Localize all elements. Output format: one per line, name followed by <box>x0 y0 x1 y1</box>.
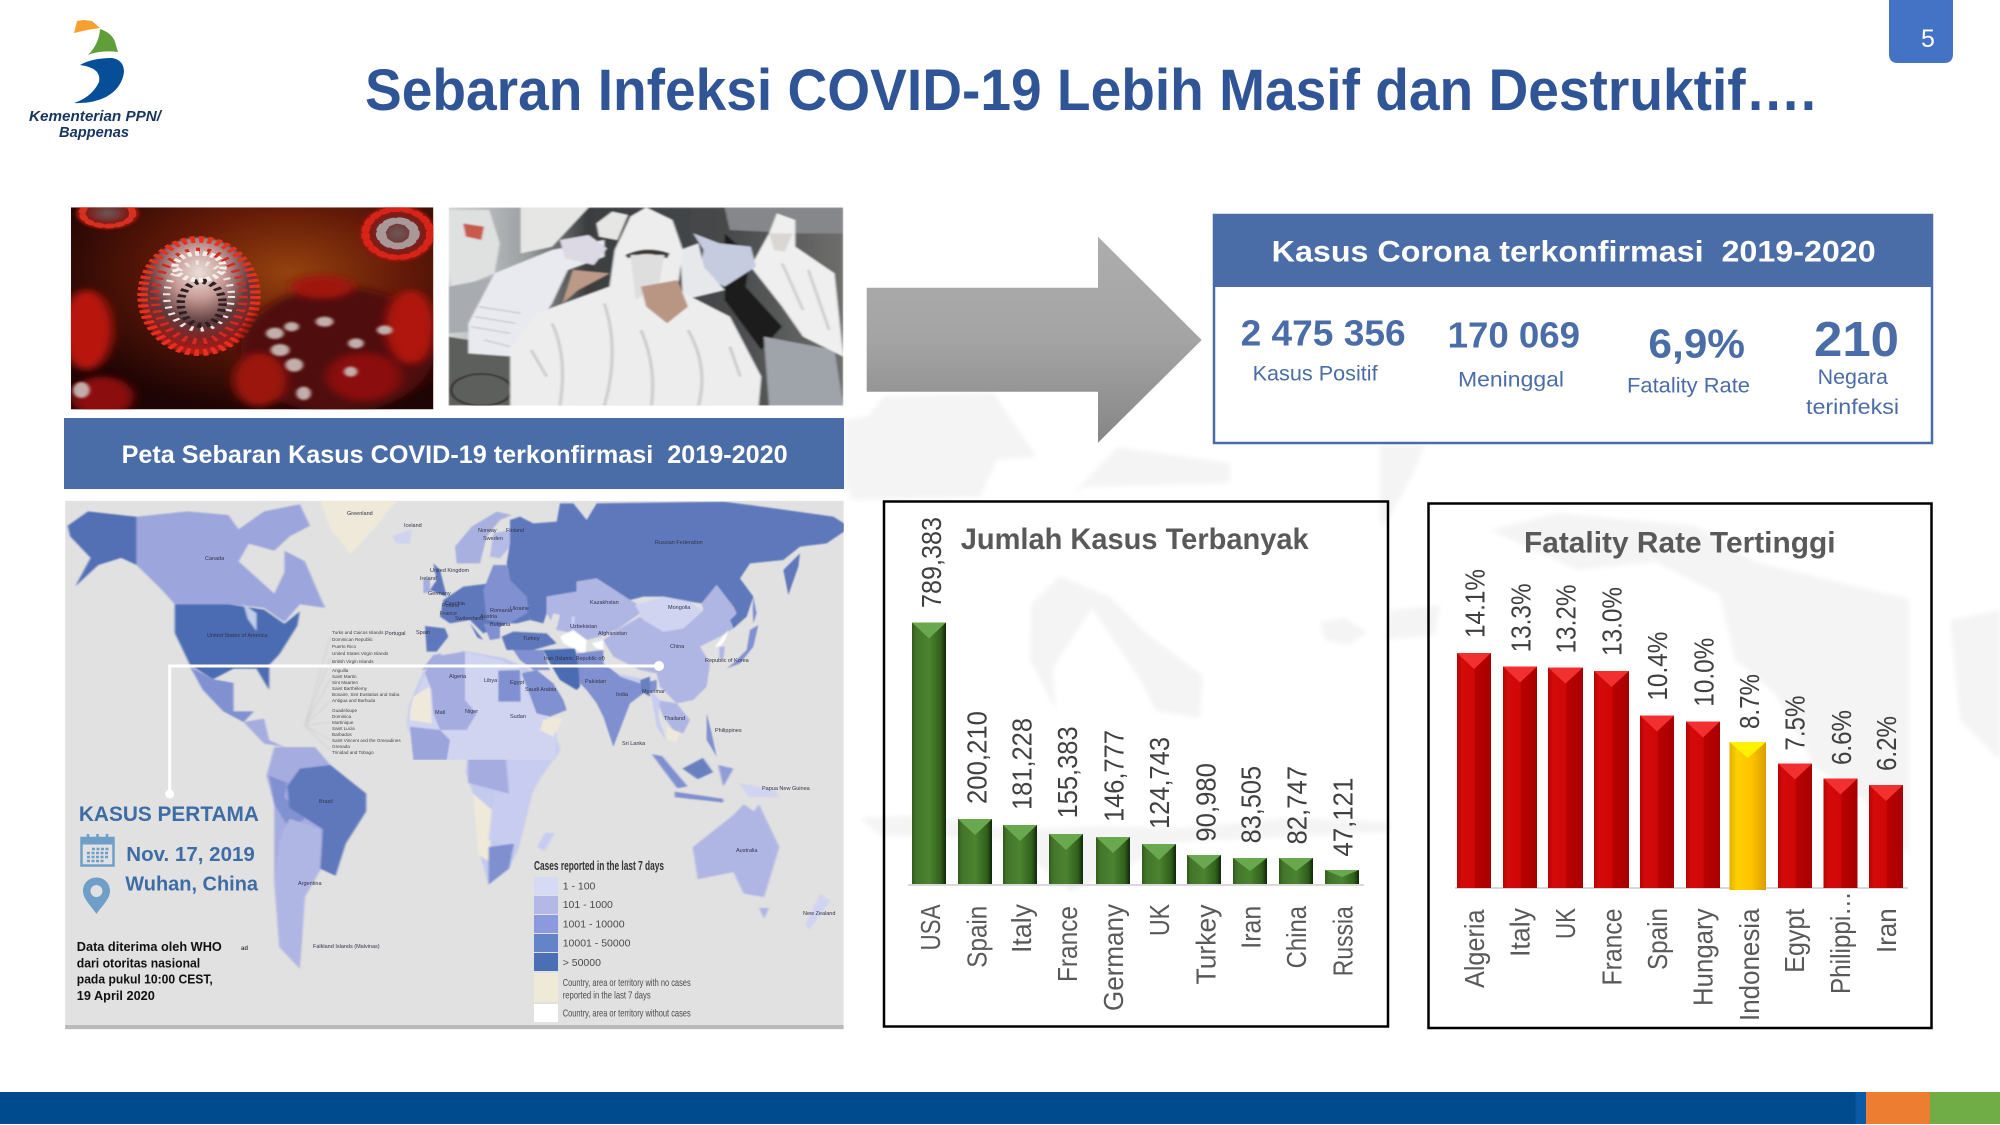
logo: Kementerian PPN/Bappenas: Bappenas <box>59 125 129 141</box>
country labels: Iran <box>1236 906 1266 949</box>
small country labels on map: Falkland Islands (Malvinas) <box>313 944 380 950</box>
small country labels on map: Germany <box>428 591 451 597</box>
small country labels on map: Sint Maarten <box>332 680 358 685</box>
data source note <box>77 940 248 1003</box>
stat: fatality rate: Fatality Rate <box>1627 375 1750 398</box>
country labels: USA <box>915 904 946 950</box>
panel header <box>1213 214 1933 287</box>
small country labels on map: Spain <box>416 630 430 636</box>
country labels: UK <box>1550 908 1581 939</box>
value labels: 13.2% <box>1550 584 1581 654</box>
value labels: 47,121 <box>1328 778 1359 857</box>
map legend: > 50000 <box>563 957 601 969</box>
small country labels on map: Barbados <box>332 732 352 737</box>
map legend: 101 - 1000 <box>563 899 613 911</box>
map legend: Country, area or territory without cases <box>563 1008 691 1020</box>
value labels: 7.5% <box>1780 696 1810 751</box>
small country labels on map: Finland <box>506 528 524 534</box>
footer colour band <box>0 1092 2000 1124</box>
small country labels on map: Grenada <box>332 744 350 749</box>
small country labels on map: Kazakhstan <box>590 600 619 606</box>
country labels: UK <box>1144 904 1175 936</box>
stat: deaths: Meninggal <box>1458 369 1564 392</box>
small country labels on map: Australia <box>736 848 758 854</box>
highlighted bar: Indonesia <box>1730 742 1766 890</box>
country labels: Spain <box>1642 908 1673 970</box>
stat: fatality rate: 6,9% <box>1648 320 1745 366</box>
small country labels on map: China <box>670 644 685 650</box>
date: Nov. 17, 2019 <box>126 844 255 866</box>
value labels <box>916 517 1359 857</box>
page number badge <box>1889 0 1953 63</box>
small country labels on map: Saint Lucia <box>332 726 355 731</box>
first case callout <box>79 802 259 914</box>
country labels: France <box>1052 906 1083 982</box>
map legend: Cases reported in the last 7 days <box>534 859 664 873</box>
country labels: Italy <box>1006 904 1037 953</box>
value labels: 10.0% <box>1688 638 1720 707</box>
panel: confirmed corona cases: Kasus Corona terkonfirmasi 2019-2020 <box>1272 236 1876 269</box>
small country labels on map: Norway <box>478 528 497 534</box>
value labels: 83,505 <box>1236 766 1266 843</box>
small country labels on map: Argentina <box>298 881 322 887</box>
logo green sail <box>88 29 118 55</box>
small country labels on map: Trinidad and Tobago <box>332 750 374 755</box>
value labels <box>1459 569 1902 771</box>
stat: positive cases: Kasus Positif <box>1253 363 1378 386</box>
data source note: ad <box>241 946 248 952</box>
value labels: 6.2% <box>1871 716 1902 771</box>
small country labels on map: Saint Vincent and the Grenadines <box>332 738 401 743</box>
small country labels on map: United States Virgin Islands <box>332 651 389 656</box>
banner: map heading <box>64 418 844 489</box>
small country labels on map: Brazil <box>319 799 333 805</box>
small country labels on map: Sudan <box>510 714 526 720</box>
stat: fatality rate <box>1627 320 1750 398</box>
small country labels on map: Algeria <box>449 674 467 680</box>
country labels: Indonesia <box>1734 908 1765 1021</box>
small country labels on map: United Kingdom <box>430 568 470 574</box>
small country labels on map: Uzbekistan <box>570 624 597 630</box>
stat: deaths: 170 069 <box>1448 314 1580 355</box>
icon: calendar <box>82 834 114 866</box>
arrow <box>867 237 1202 443</box>
small country labels on map: Thailand <box>664 716 685 722</box>
small country labels on map: Czechia <box>445 601 466 607</box>
country labels: Turkey <box>1191 904 1222 984</box>
small country labels on map: Republic of Korea <box>705 658 750 664</box>
small country labels on map: Myanmar <box>642 689 665 695</box>
country labels: Russia <box>1328 906 1359 976</box>
stat: positive cases: 2 475 356 <box>1241 313 1406 354</box>
value labels: 82,747 <box>1282 766 1313 844</box>
small country labels on map: Sri Lanka <box>622 741 646 747</box>
data source note: dari otoritas nasional <box>77 957 200 971</box>
small country labels on map: Afghanistan <box>598 631 627 637</box>
small country labels on map: Niger <box>465 709 478 715</box>
data source note: Data diterima oleh WHO <box>77 940 222 954</box>
small country labels on map: British Virgin Islands <box>332 659 374 664</box>
photo: coronavirus particles <box>70 207 434 410</box>
country labels: France <box>1597 908 1628 986</box>
small country labels on map: Puerto Rico <box>332 644 356 649</box>
value labels: 14.1% <box>1459 569 1490 638</box>
small country labels on map: Pakistan <box>585 679 606 685</box>
country labels: Egypt <box>1779 909 1810 973</box>
country labels: Spain <box>962 906 993 968</box>
bars <box>912 622 1359 884</box>
value labels: 181,228 <box>1007 718 1038 810</box>
country labels: Algeria <box>1459 909 1490 988</box>
small country labels on map: Mongolia <box>668 605 691 611</box>
chart title: Fatality Rate Tertinggi <box>1524 526 1836 560</box>
country labels: China <box>1281 906 1312 968</box>
value labels: 10.4% <box>1642 632 1673 701</box>
background watermark map of Indonesia <box>845 393 2000 892</box>
data source note: pada pukul 10:00 CEST, <box>77 973 213 987</box>
value labels: 8.7% <box>1734 674 1765 729</box>
map legend: Country, area or territory with no cases <box>563 977 691 989</box>
small country labels on map: Iceland <box>404 523 422 529</box>
country labels <box>1459 892 1902 1021</box>
small country labels on map <box>205 511 835 950</box>
callout heading: KASUS PERTAMA <box>79 802 259 826</box>
stat: countries infected: Negara <box>1818 366 1888 389</box>
small country labels on map: Antigua and Barbuda <box>332 698 376 703</box>
value labels: 13.0% <box>1597 587 1628 656</box>
small country labels on map: Ukraine <box>510 606 529 612</box>
data source note: 19 April 2020 <box>77 989 155 1003</box>
location: Wuhan, China <box>125 874 259 896</box>
small country labels on map: Libya <box>484 678 498 684</box>
small country labels on map: France <box>440 611 457 617</box>
small country labels on map: Poland <box>442 603 459 609</box>
stat: deaths <box>1448 314 1580 392</box>
value labels: 13.3% <box>1505 583 1536 652</box>
bars <box>1457 653 1903 890</box>
connector line from Wuhan to first-case callout <box>165 661 664 798</box>
small country labels on map: India <box>616 692 629 698</box>
small country labels on map: Turkey <box>523 636 540 642</box>
value labels: 90,980 <box>1191 763 1222 842</box>
map legend: 10001 - 50000 <box>563 938 631 950</box>
small country labels on map: Portugal <box>385 631 406 637</box>
stat: countries infected: 210 <box>1814 313 1899 367</box>
small country labels on map: Martinique <box>332 720 354 725</box>
small country labels on map: Philippines <box>715 728 742 734</box>
map legend: 1 - 100 <box>563 880 596 892</box>
small country labels on map: Austria <box>480 614 498 620</box>
logo blue crescent <box>74 58 124 103</box>
stat: countries infected: terinfeksi <box>1806 396 1899 419</box>
small country labels on map: Bonaire, Sint Eustatius and Saba <box>332 692 400 697</box>
small country labels on map: Egypt <box>510 680 525 686</box>
bar chart: most cases <box>884 502 1388 1026</box>
small country labels on map: Turks and Caicos Islands <box>332 630 384 635</box>
small country labels on map: Saint Martin <box>332 674 357 679</box>
bar chart: highest fatality rate <box>1428 504 1932 1028</box>
Eurasia and north Africa on map <box>407 502 844 760</box>
country labels: Philippi… <box>1825 892 1856 994</box>
map legend: reported in the last 7 days <box>563 989 651 1001</box>
small country labels on map: Iran (Islamic Republic of) <box>544 656 605 662</box>
small country labels on map: Saudi Arabia <box>525 687 557 693</box>
world map panel <box>65 501 844 1029</box>
small country labels on map: Ireland <box>420 576 437 582</box>
logo orange sail <box>74 20 100 33</box>
map legend <box>534 859 691 1022</box>
stat: countries infected <box>1806 313 1899 419</box>
banner: map heading: Peta Sebaran Kasus COVID-19 terkonfirmasi 2019-2020 <box>122 441 788 469</box>
small country labels on map: Papua New Guinea <box>762 786 811 792</box>
country labels: Germany <box>1098 904 1129 1011</box>
icon: location pin <box>83 878 110 914</box>
small country labels on map: Russian Federation <box>655 540 703 546</box>
photo: workers in protective suits <box>448 207 844 406</box>
value labels: 200,210 <box>962 711 993 804</box>
small country labels on map: Dominica <box>332 714 352 719</box>
chart title: Jumlah Kasus Terbanyak <box>961 523 1309 556</box>
small country labels on map: Saint Barthélemy <box>332 686 368 691</box>
small country labels on map: Greenland <box>347 511 373 517</box>
value labels: 789,383 <box>916 517 947 608</box>
small country labels on map: Romania <box>490 608 513 614</box>
small country labels on map: Anguilla <box>332 668 349 673</box>
country labels: Hungary <box>1688 908 1719 1006</box>
logo: Kementerian PPN/Bappenas <box>29 20 163 141</box>
value labels: 6.6% <box>1826 710 1857 765</box>
small country labels on map: Mali <box>435 710 445 716</box>
value labels: 146,777 <box>1098 730 1130 822</box>
stat: positive cases <box>1241 313 1406 386</box>
title: Sebaran Infeksi COVID-19 Lebih Masif dan Destruktif…. <box>365 58 1816 123</box>
panel: confirmed corona cases <box>1213 214 1933 443</box>
small country labels on map: Guadeloupe <box>332 708 357 713</box>
small country labels on map: Dominican Republic <box>332 637 374 642</box>
logo text: Kementerian PPN/ <box>29 109 163 125</box>
map legend: 1001 - 10000 <box>563 918 625 930</box>
page number badge: 5 <box>1921 25 1935 53</box>
small country labels on map: New Zealand <box>803 911 835 917</box>
country labels <box>915 904 1359 1011</box>
small country labels on map: Sweden <box>483 536 503 542</box>
value labels: 155,383 <box>1052 726 1083 818</box>
small country labels on map: Canada <box>205 556 225 562</box>
small country labels on map: United States of America <box>207 633 268 639</box>
small country labels on map: Switzerland <box>455 616 483 622</box>
country labels: Iran <box>1871 908 1902 953</box>
value labels: 124,743 <box>1144 737 1175 829</box>
country labels: Italy <box>1505 908 1536 957</box>
small country labels on map: Bulgaria <box>490 622 511 628</box>
